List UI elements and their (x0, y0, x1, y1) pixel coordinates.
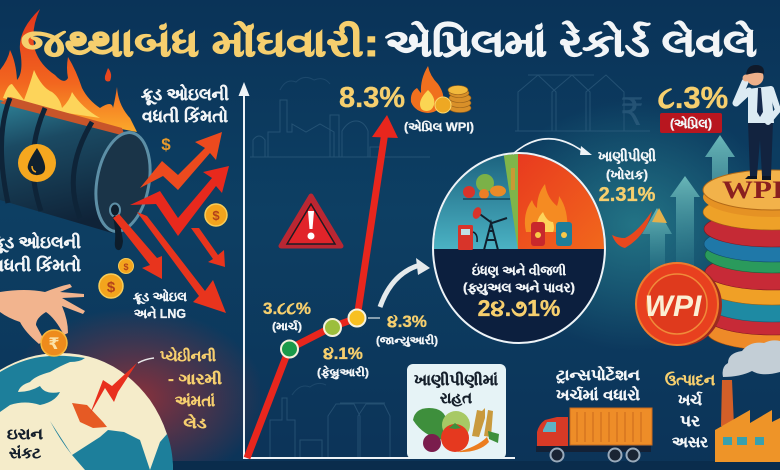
label: crude and LNG (133, 288, 187, 321)
lightning bolt crisis marker (90, 358, 154, 414)
icon: coin stack (448, 86, 471, 112)
icon: flame (411, 66, 443, 113)
icon: warning triangle (281, 196, 341, 246)
oil barrel (0, 97, 157, 250)
rising teal arrows (642, 135, 735, 290)
background line art: factories and silos: ₹ (620, 92, 644, 134)
value 8.3% April: ૮.3% (658, 80, 728, 115)
label: production cost impact (665, 371, 715, 451)
label: crude oil rising prices (141, 83, 229, 126)
label: gold text near globe: - ગારમી (168, 370, 222, 388)
label: February: ૪.1% (323, 344, 363, 363)
label: crude and LNG: અને LNG (134, 305, 186, 321)
label: transport cost: ટ્રાન્સપોર્ટેશન (556, 365, 640, 384)
label: January: (જાન્યુઆરી) (376, 333, 438, 347)
dollar signs and coins: $ (212, 208, 220, 223)
label: March: (માર્ચ) (272, 319, 302, 333)
label: transport cost: ખર્ચમાં વધારો (556, 385, 640, 404)
label: production cost impact: ખર્ચ (678, 391, 703, 409)
red trend line (247, 115, 398, 458)
label: food: 2.31% (599, 184, 656, 206)
curved arrow to pie (380, 258, 430, 307)
label: production cost impact: ઉત્પાદન (665, 371, 715, 389)
icon: vegetables (463, 174, 510, 199)
icon: vegetables (413, 408, 499, 452)
label: transport cost (556, 365, 640, 404)
dollar signs and coins: $ (161, 135, 171, 154)
icon: factory with smoke (715, 340, 780, 462)
label: March: 3.૮૮% (263, 299, 311, 318)
big WPI coin (636, 263, 722, 346)
label: crude oil prices left (0, 231, 81, 275)
value 8.3% April: (એપ્રિલ) (670, 115, 712, 131)
coin stack WPI (703, 170, 780, 350)
pie panel: fuel and power: (ફ્યુઅલ અને પાવર) (463, 279, 575, 296)
dollar signs and coins: $ (123, 262, 129, 272)
dollar signs and coins: $ (107, 279, 116, 296)
curved arrow to food label (513, 139, 592, 155)
food relief panel: રાહત (440, 390, 472, 407)
label: food: (ખોરાક) (606, 166, 648, 182)
hand dropping rupee coin (0, 284, 85, 356)
pie panel: fuel and power: 2૪.૭1% (478, 295, 560, 321)
icon: truck (536, 408, 652, 462)
globe (0, 353, 173, 470)
label: food: ખાણીપીણી (598, 148, 656, 164)
label: gold text near globe: પ્યેઇીનની (160, 346, 216, 365)
label: gold text near globe: અંમતાં (175, 393, 215, 410)
food relief panel (407, 364, 506, 459)
price arrows rising and falling (113, 132, 229, 313)
label: Iran crisis: ઇરાન (7, 426, 43, 443)
label: food (598, 148, 656, 206)
worried man (736, 65, 778, 180)
pie panel: fuel and power: ઇંધણ અને વીજળી (472, 262, 566, 278)
background line art: factories and silos (250, 75, 650, 458)
headline value 8.3% (339, 66, 474, 134)
label: production cost impact: પર (680, 413, 700, 430)
heading (21, 20, 757, 65)
headline value 8.3%: 8.3% (339, 82, 405, 114)
label: crude oil rising prices: વધતી કિંમતો (142, 105, 228, 126)
big WPI coin: WPI (645, 290, 702, 323)
icon: flames (525, 184, 567, 232)
flames (0, 9, 137, 132)
dollar signs and coins (99, 135, 227, 298)
icon: rupee coin: ₹ (48, 336, 60, 353)
heading: એપ્રિલમાં રેકોર્ડ લેવલે (385, 20, 757, 65)
label: February: (ફેબ્રુઆરી) (317, 365, 369, 380)
label: gold text near globe: લેડ (184, 413, 206, 432)
icon: oil drop badge (18, 144, 56, 182)
label: crude and LNG: ક્રૂડ ઓઇલ (133, 288, 187, 306)
value 8.3% April (658, 80, 728, 133)
label: production cost impact: અસર (672, 434, 708, 451)
label: crude oil rising prices: ક્રૂડ ઓઇલની (141, 83, 229, 105)
icon: gas cylinders (531, 222, 572, 246)
food relief panel: ખાણીપીણીમાં (414, 371, 498, 389)
label: Iran crisis: સંકટ (9, 445, 41, 462)
label: January (376, 312, 438, 347)
line chart axes (238, 82, 515, 458)
coin stack WPI: WPI (722, 177, 780, 204)
label: gold text near globe (160, 346, 222, 432)
data points (281, 310, 380, 358)
label: January: ૪.3% (387, 312, 427, 331)
label: February (317, 344, 369, 380)
label: Iran crisis (7, 426, 43, 462)
red dip swoosh (612, 208, 667, 248)
heading: જથ્થાબંધ મોંઘવારી: (21, 20, 379, 65)
oil drip (113, 215, 123, 250)
icon: wheat (511, 168, 515, 190)
icon: petrol pump and oil rig (458, 206, 507, 250)
headline value 8.3%: (એપ્રિલ WPI) (404, 119, 474, 134)
pie panel: fuel and power (430, 150, 610, 349)
label: March (263, 299, 311, 333)
